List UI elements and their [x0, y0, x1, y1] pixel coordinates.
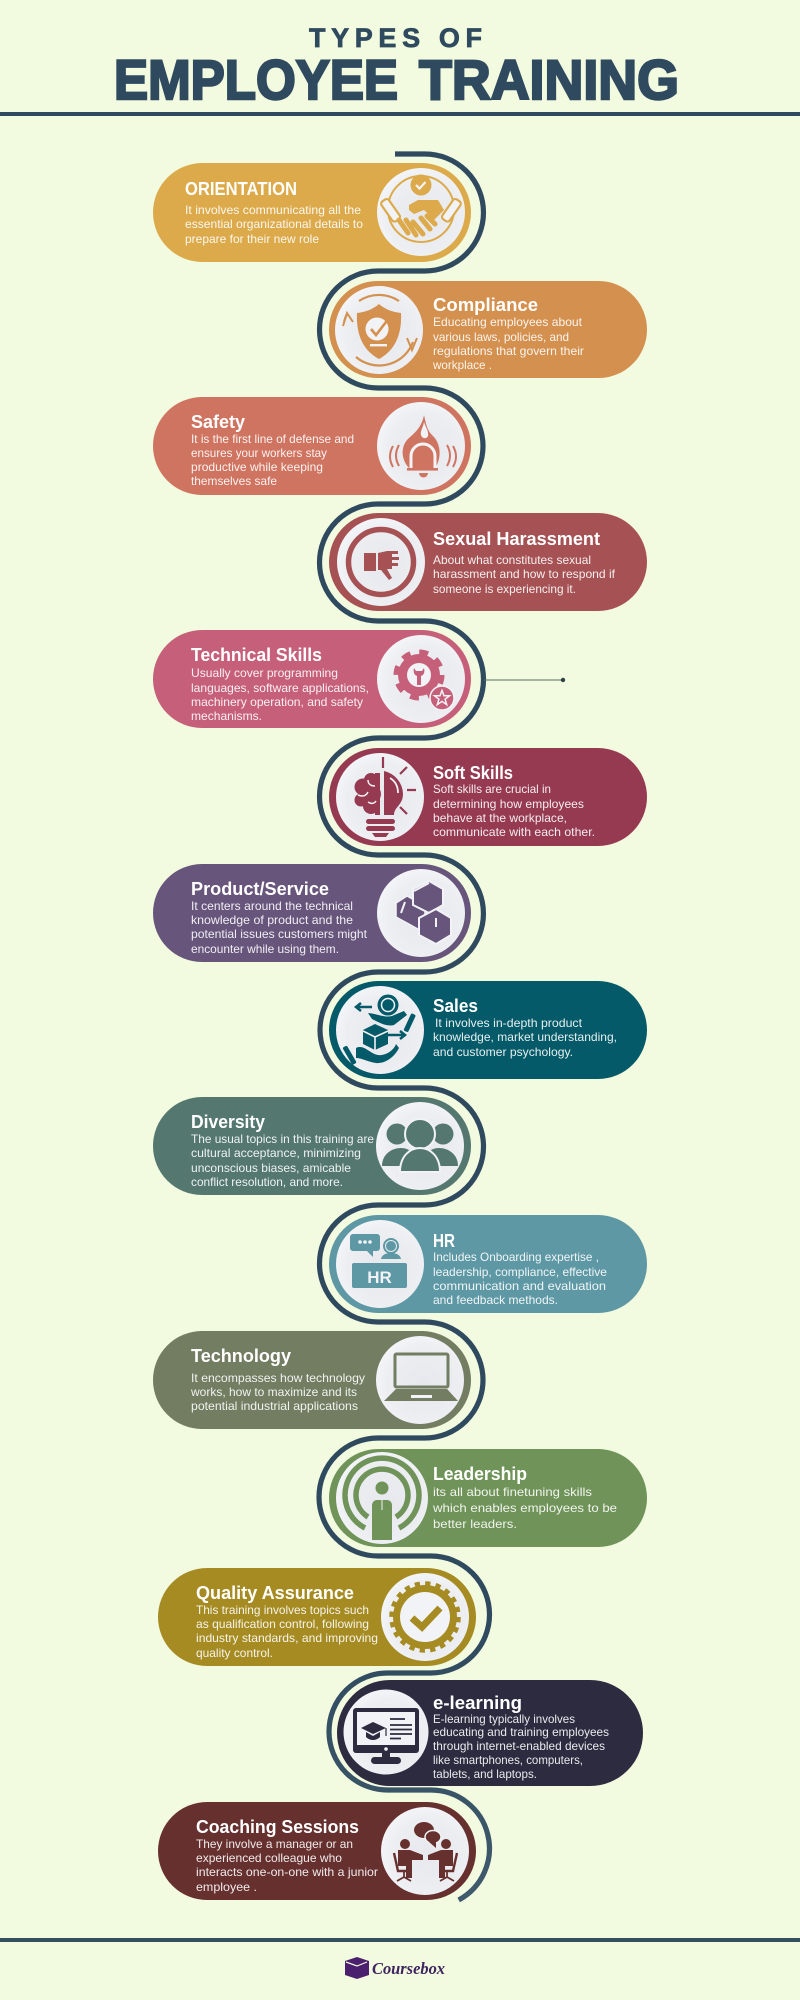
description: coaching sessions: They involve a manager or an — [196, 1837, 353, 1851]
icon: monitor with graduation cap — [344, 1690, 428, 1774]
icon: leader with rings — [336, 1452, 428, 1544]
description: hr: communication and evaluation — [433, 1279, 606, 1293]
description: diversity — [191, 1132, 374, 1189]
heading: sales: Sales — [433, 995, 478, 1016]
description: compliance — [432, 315, 584, 372]
description: compliance: various laws, policies, and — [433, 330, 569, 344]
panel: coaching sessions — [158, 1802, 476, 1900]
icon: stacked boxes — [377, 869, 465, 957]
description: technical skills — [191, 666, 369, 723]
description: sexual harassment: someone is experiencing it. — [433, 582, 576, 596]
icon: laptop — [376, 1336, 464, 1424]
description: leadership: better leaders. — [433, 1517, 517, 1531]
heading: technology: Technology — [191, 1345, 292, 1366]
panel: sales — [329, 981, 647, 1079]
panel: product/service — [153, 864, 471, 962]
title line: types of: TYPES OF — [309, 23, 482, 53]
panel: leadership — [329, 1449, 647, 1547]
description: soft skills — [433, 782, 595, 839]
description: product/service: potential issues customers might — [191, 927, 368, 941]
header rule — [0, 112, 800, 116]
description: soft skills: behave at the workplace, — [433, 811, 567, 825]
description: compliance: workplace . — [432, 358, 492, 372]
panel: soft skills — [329, 748, 647, 846]
heading: quality assurance: Quality Assurance — [196, 1582, 354, 1603]
description: soft skills: Soft skills are crucial in — [433, 782, 551, 796]
icon: exchanging hands — [336, 986, 424, 1074]
description: technical skills: mechanisms. — [191, 709, 262, 723]
description: e-learning — [433, 1712, 609, 1781]
description: technology — [190, 1371, 365, 1413]
icon: flame alarm — [377, 402, 465, 490]
description: sales: It involves in-depth product — [435, 1016, 583, 1030]
description: leadership: which enables employees to be — [432, 1501, 617, 1515]
description: orientation: It involves communicating all the — [185, 203, 361, 217]
description: hr: and feedback methods. — [433, 1293, 558, 1307]
description: technical skills: languages, software applications, — [191, 681, 369, 695]
heading: diversity: Diversity — [191, 1111, 266, 1132]
description: safety: It is the first line of defense and — [191, 432, 354, 446]
description: sexual harassment: About what constitutes sexual — [433, 553, 591, 567]
description: safety — [191, 432, 354, 488]
description: leadership: its all about finetuning skills — [433, 1485, 592, 1499]
icon: hr person with speech bubble — [336, 1220, 424, 1308]
heading: orientation: ORIENTATION — [185, 178, 297, 199]
description: technology: It encompasses how technology — [191, 1371, 365, 1385]
heading: hr: HR — [433, 1230, 455, 1251]
description: safety: ensures your workers stay — [191, 446, 327, 460]
description: sexual harassment — [433, 553, 616, 596]
panel: hr — [329, 1215, 647, 1313]
panel: diversity — [153, 1097, 471, 1195]
icon: handshake — [377, 168, 465, 256]
title word: employee: EMPLOYEE — [114, 48, 398, 111]
icon: thumbs down — [337, 518, 425, 606]
callout line with dot — [484, 678, 565, 682]
description: coaching sessions: experienced colleague who — [196, 1851, 342, 1865]
description: quality assurance: industry standards, and improving — [196, 1631, 378, 1645]
heading: technical skills: Technical Skills — [191, 644, 322, 665]
description: product/service: encounter while using them. — [191, 942, 339, 956]
description: soft skills: determining how employees — [433, 797, 584, 811]
description: hr: Includes Onboarding expertise , — [433, 1250, 599, 1264]
panel: technical skills — [153, 630, 471, 728]
description: orientation: essential organizational details to — [185, 217, 363, 231]
description: sales: and customer psychology. — [433, 1045, 573, 1059]
title — [114, 23, 679, 111]
footer rule — [0, 1938, 800, 1942]
panel: orientation — [153, 163, 471, 262]
description: technical skills: machinery operation, and safety — [191, 695, 363, 709]
icon: group of people — [376, 1102, 464, 1190]
icon: gear with wrench and star — [377, 635, 465, 723]
panel: compliance — [329, 281, 647, 378]
description: compliance: regulations that govern their — [433, 344, 584, 358]
description: safety: themselves safe — [191, 474, 277, 488]
icon: quality badge — [381, 1573, 469, 1661]
winding connector path — [319, 154, 490, 1900]
description: quality assurance: This training involves topics such — [196, 1603, 369, 1617]
icon: shield with check — [335, 286, 423, 374]
description: sales — [433, 1016, 617, 1059]
description: diversity: The usual topics in this training are — [191, 1132, 374, 1146]
description: safety: productive while keeping — [191, 460, 323, 474]
panel: safety — [153, 397, 471, 495]
description: orientation — [185, 203, 363, 246]
heading: safety: Safety — [191, 411, 246, 432]
description: hr: leadership, compliance, effective — [433, 1265, 607, 1279]
description: e-learning: through internet-enabled devices — [433, 1739, 605, 1753]
description: coaching sessions: interacts one-on-one with a junior — [196, 1865, 378, 1879]
description: e-learning: E-learning typically involves — [433, 1712, 575, 1726]
logo: coursebox — [345, 1957, 445, 1979]
description: diversity: cultural acceptance, minimizing — [191, 1146, 361, 1160]
heading: compliance: Compliance — [433, 294, 538, 315]
description: diversity: conflict resolution, and more. — [191, 1175, 343, 1189]
description: quality assurance: as qualification control, following — [196, 1617, 369, 1631]
icon: one-on-one meeting — [381, 1807, 469, 1895]
description: e-learning: like smartphones, computers, — [433, 1753, 583, 1767]
panel: quality assurance — [158, 1568, 476, 1666]
description: e-learning: educating and training employees — [433, 1725, 609, 1739]
icon: hr person with speech bubble: HR — [367, 1268, 392, 1287]
logo cube — [345, 1957, 369, 1979]
description: coaching sessions: employee . — [196, 1880, 257, 1894]
description: sexual harassment: harassment and how to respond if — [433, 567, 616, 581]
description: technology: potential industrial applications — [191, 1399, 358, 1413]
panel: sexual harassment — [329, 513, 647, 611]
description: soft skills: communicate with each other. — [433, 825, 595, 839]
heading: coaching sessions: Coaching Sessions — [196, 1816, 359, 1837]
heading: leadership: Leadership — [433, 1463, 527, 1484]
description: diversity: unconscious biases, amicable — [191, 1161, 351, 1175]
title word: training: TRAINING — [419, 48, 679, 111]
heading: soft skills: Soft Skills — [433, 762, 513, 783]
description: hr — [433, 1250, 607, 1307]
description: sales: knowledge, market understanding, — [433, 1030, 617, 1044]
description: compliance: Educating employees about — [433, 315, 583, 329]
description: technology: works, how to maximize and its — [190, 1385, 357, 1399]
description: quality assurance — [196, 1603, 378, 1660]
heading: product/service: Product/Service — [191, 878, 329, 899]
panel: e-learning — [337, 1680, 643, 1786]
description: product/service: knowledge of product and the — [191, 913, 353, 927]
description: e-learning: tablets, and laptops. — [433, 1767, 537, 1781]
description: product/service — [191, 899, 368, 956]
description: leadership — [432, 1485, 617, 1531]
description: product/service: It centers around the technical — [191, 899, 353, 913]
heading: e-learning: e-learning — [433, 1692, 522, 1713]
heading: sexual harassment: Sexual Harassment — [433, 528, 600, 549]
description: orientation: prepare for their new role — [185, 232, 319, 246]
description: quality assurance: quality control. — [196, 1646, 273, 1660]
icon: brain and light bulb — [336, 753, 424, 841]
panel: technology — [153, 1331, 471, 1429]
description: technical skills: Usually cover programming — [191, 666, 338, 680]
logo wordmark: Coursebox — [372, 1959, 445, 1978]
description: coaching sessions — [196, 1837, 378, 1894]
